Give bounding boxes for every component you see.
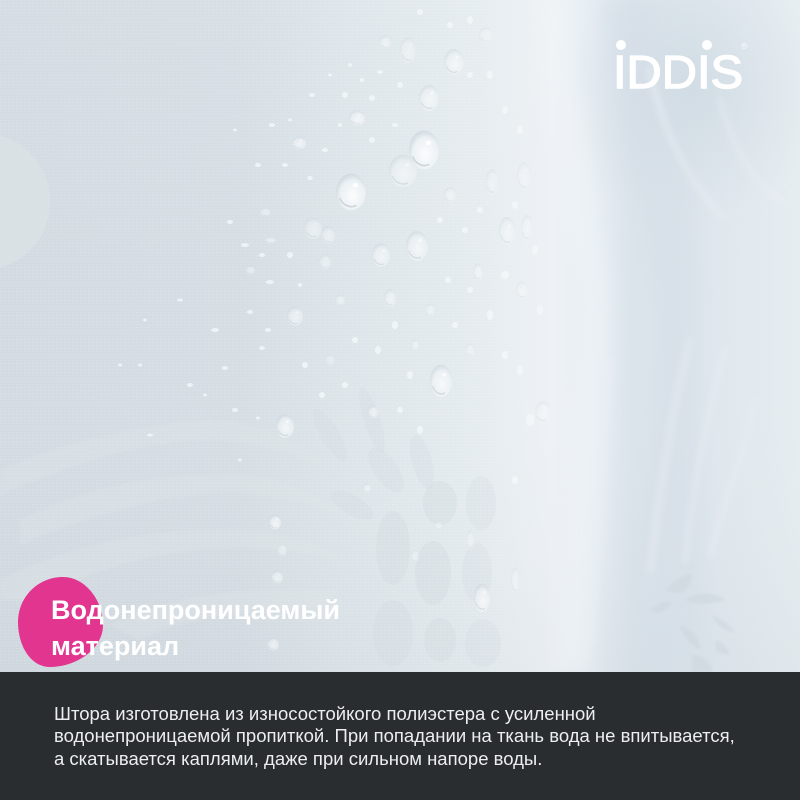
curtain fold shading xyxy=(540,0,800,672)
description text: водонепроницаемой пропиткой. При попадании на ткань вода не впитывается, xyxy=(54,725,735,746)
dark description band xyxy=(0,672,800,800)
pattern: flower leaves lower right xyxy=(650,574,735,672)
pattern: soft fold strokes on right xyxy=(590,70,780,640)
heading xyxy=(51,595,340,661)
heading: материал xyxy=(51,631,179,661)
pattern: plain circle at left edge xyxy=(0,135,50,268)
fabric weave texture xyxy=(0,0,298,670)
water drops large xyxy=(276,37,551,612)
heading: Водонепроницаемый xyxy=(51,595,340,625)
description text xyxy=(54,702,735,769)
logo: iDDiS: IDDIS xyxy=(613,46,743,98)
tiny droplet scatter xyxy=(118,9,543,484)
description text: Штора изготовлена из износостойкого полиэстера с усиленной xyxy=(54,702,596,724)
pattern: petals in centre xyxy=(307,385,501,667)
water drops small xyxy=(245,27,528,650)
pink blob behind heading xyxy=(18,577,103,667)
pattern: leaf bands lower left xyxy=(0,420,365,640)
logo: iDDiS: ® xyxy=(741,41,748,51)
description text: а скатывается каплями, даже при сильном напоре воды. xyxy=(54,748,542,769)
